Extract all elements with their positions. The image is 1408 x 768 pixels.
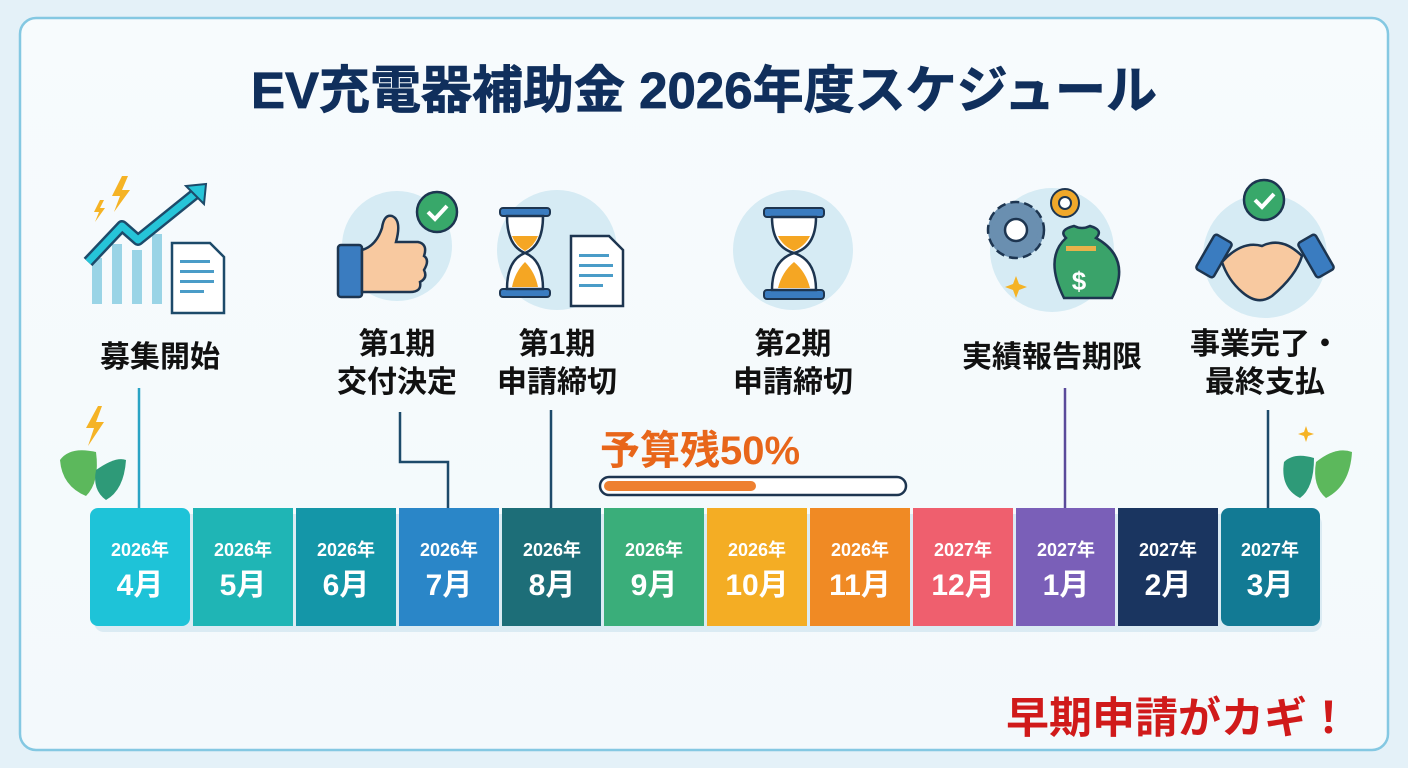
timeline bar: 2026年 [728, 539, 786, 560]
budget remaining label: 予算残50% [600, 429, 800, 473]
timeline bar: 2027年 [934, 539, 992, 560]
icon: left leaves and bolt [60, 406, 126, 500]
title: EV充電器補助金 2026年度スケジュール [251, 62, 1157, 119]
timeline bar: 2026年 [831, 539, 889, 560]
icon: gears and money bag [988, 188, 1119, 312]
icon: hourglass [733, 190, 853, 310]
timeline bar: 11月 [829, 569, 891, 602]
label: 第2期申請締切: 第2期 [755, 328, 831, 361]
label: 実績報告期限: 実績報告期限 [962, 341, 1142, 374]
timeline bar: 2026年 [214, 539, 272, 560]
icon: hourglass with document [497, 190, 623, 310]
timeline bar: 3月 [1247, 569, 1293, 602]
timeline bar: 2月 [1145, 569, 1191, 602]
label: 第1期交付決定: 交付決定 [337, 366, 457, 399]
timeline bar: 12月 [931, 569, 995, 602]
icon: thumbs up with check [338, 191, 457, 301]
timeline bar [90, 508, 1322, 632]
timeline bar: 2026年 [625, 539, 683, 560]
timeline bar: 7月 [426, 569, 472, 602]
label: 第2期申請締切: 申請締切 [733, 366, 853, 399]
label: 第1期交付決定: 第1期 [359, 328, 435, 361]
callout: early application is key: 早期申請がカギ！ [1006, 695, 1350, 743]
label: 第1期申請締切: 第1期 [519, 328, 595, 361]
icon: growth chart with document [88, 176, 224, 313]
timeline bar: 1月 [1043, 569, 1089, 602]
timeline bar: 2027年 [1241, 539, 1299, 560]
timeline bar: 2026年 [111, 539, 169, 560]
label: 募集開始: 募集開始 [100, 341, 220, 374]
timeline bar: 4月 [117, 569, 163, 602]
label: 事業完了・最終支払: 最終支払 [1205, 366, 1325, 399]
label: 第1期申請締切: 申請締切 [497, 366, 617, 399]
timeline bar: 2026年 [420, 539, 478, 560]
icon: gears and money bag: $ [1072, 266, 1087, 296]
label: 事業完了・最終支払: 事業完了・ [1190, 328, 1340, 361]
timeline bar: 2027年 [1139, 539, 1197, 560]
icon: handshake with check [1195, 180, 1335, 318]
timeline bar: 9月 [631, 569, 677, 602]
timeline bar: 2026年 [317, 539, 375, 560]
timeline bar: 2027年 [1037, 539, 1095, 560]
timeline bar: 6月 [323, 569, 369, 602]
timeline bar: 5月 [220, 569, 266, 602]
progress bar 50% [600, 477, 906, 495]
timeline bar: 10月 [725, 569, 789, 602]
icon: right leaves and sparkle [1283, 426, 1352, 498]
timeline bar: 2026年 [523, 539, 581, 560]
connector lines [139, 388, 1268, 508]
timeline bar: 8月 [529, 569, 575, 602]
